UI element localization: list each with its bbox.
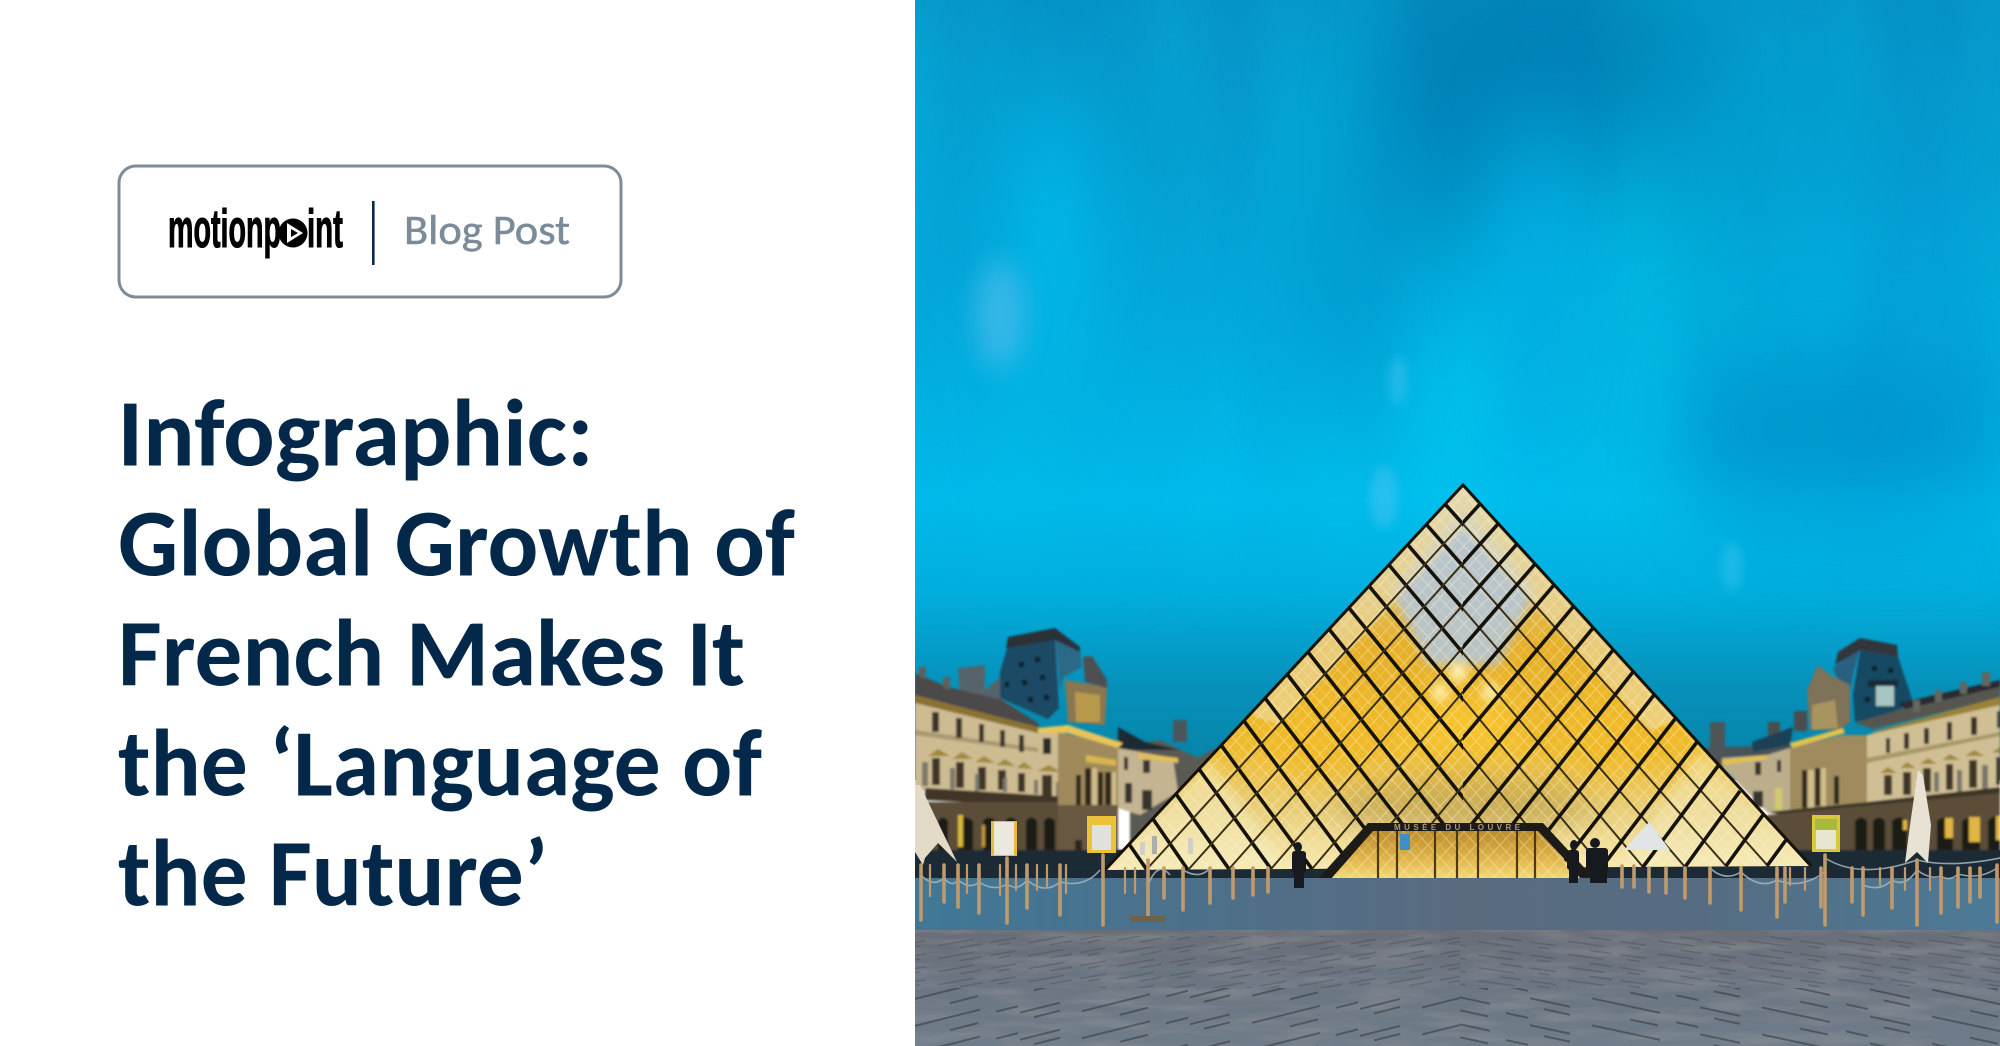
title: Global Growth of [118,486,795,602]
title [118,380,795,932]
stanchion ropes [921,858,2000,888]
title: the ‘Language of [118,706,762,822]
base shadow behind plaza [915,850,2000,878]
badge: motionpoint blog post [118,164,622,298]
logo: motionpoint wordmark: int [307,199,343,259]
panel: Louvre pyramid photo [915,0,2000,1046]
title: the Future’ [118,816,548,932]
label: Blog Post: Blog Post [404,205,570,256]
building: right wing of the Louvre [1702,638,2000,870]
panel: left text panel [0,0,915,1046]
pyramid: glass lattice [1100,480,1820,875]
building: left wing of the Louvre [915,628,1215,870]
stanchion posts [921,855,1997,925]
umbrellas and small tent [915,770,1931,865]
logo: motionpoint wordmark: motionp [168,199,281,259]
ground: smooth plaza and cobblestones [915,878,2000,1046]
pyramid entrance: Musée du Louvre [1317,823,1592,880]
stanchion base [1131,916,1165,922]
title: French Makes It [118,596,745,712]
people silhouettes [1292,838,1608,888]
lattice bars [1129,504,1786,870]
sky with streaked clouds [915,0,2000,780]
pyramid entrance: Musée du Louvre: MUSÉE DU LOUVRE [1394,823,1521,832]
sign boards [991,815,1840,856]
